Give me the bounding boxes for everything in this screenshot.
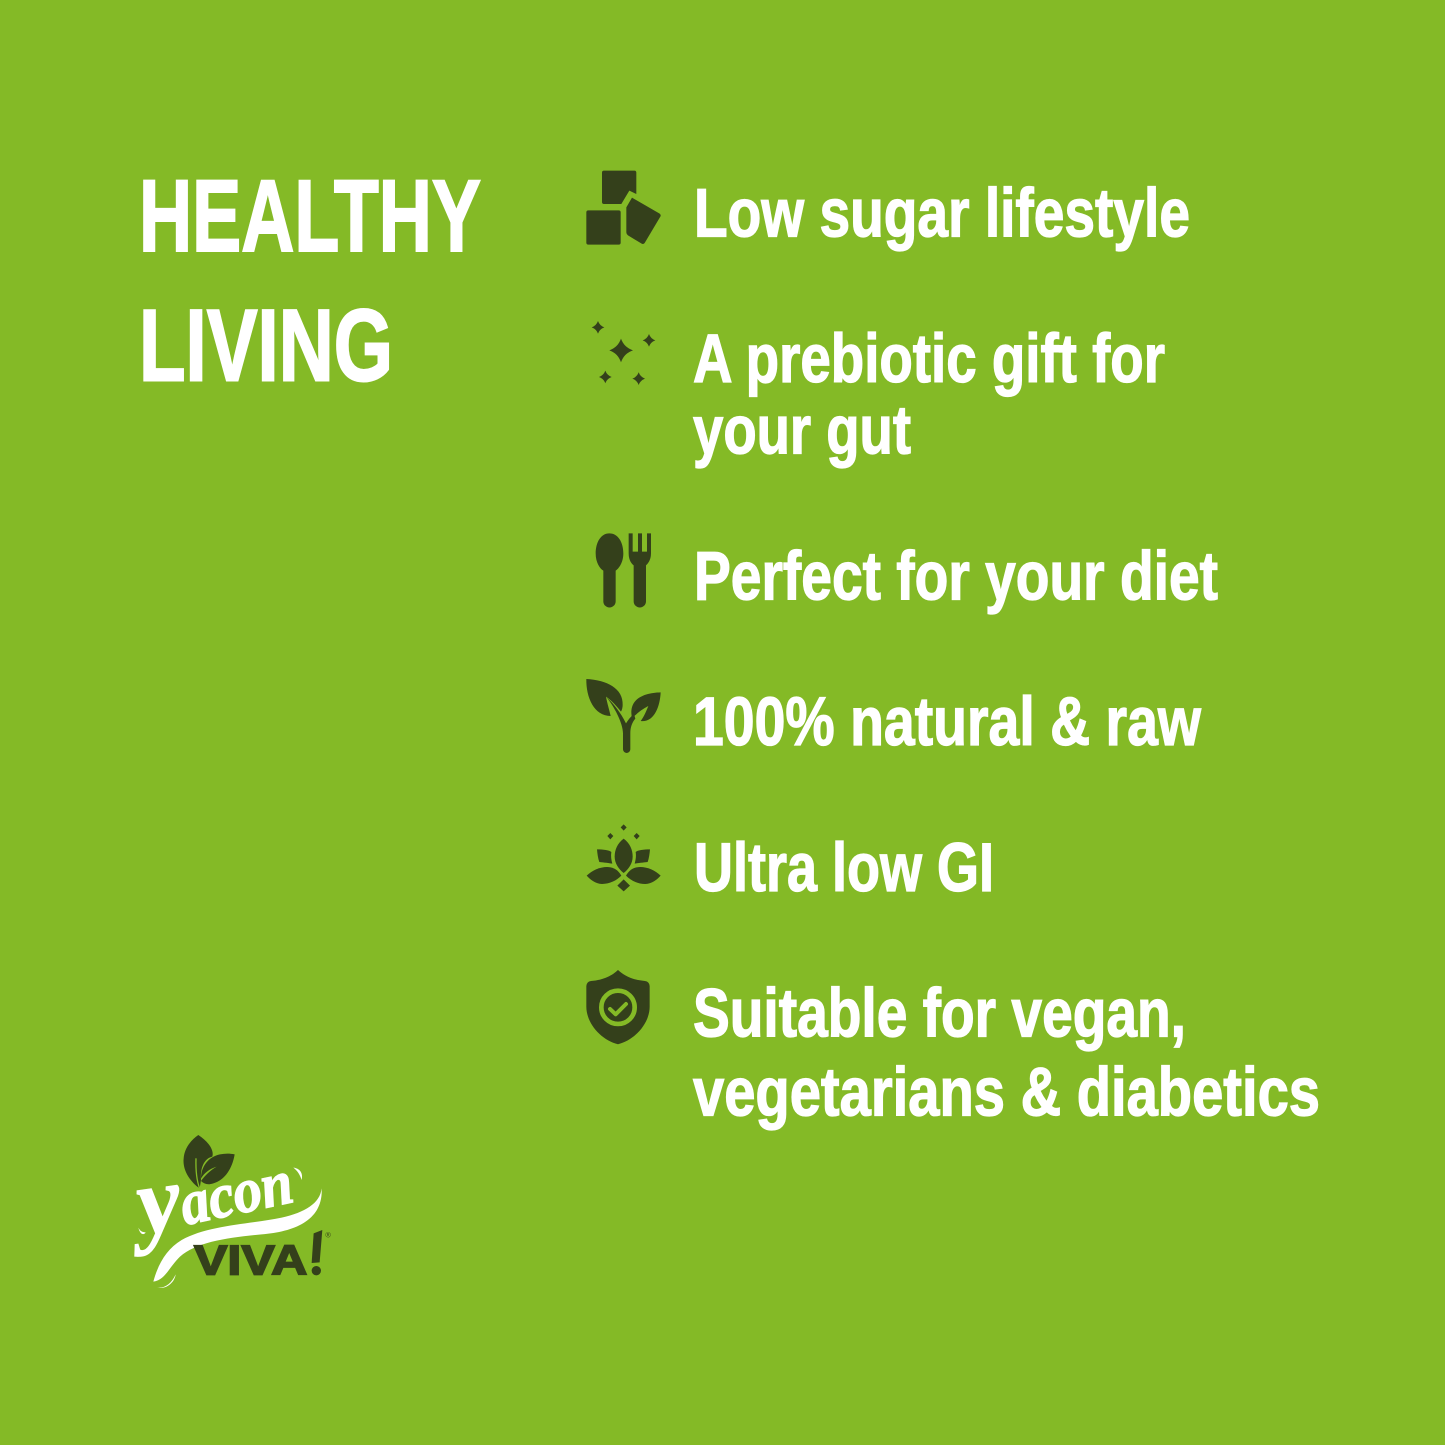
title: LIVING — [139, 288, 393, 402]
title: HEALTHY — [139, 159, 481, 273]
text: prebiotic gift: your gut — [693, 392, 911, 468]
logo script wordmark: y — [120, 1144, 188, 1257]
logo script wordmark — [120, 1144, 299, 1257]
logo script wordmark: acon — [173, 1147, 299, 1239]
text: natural and raw: 100% natural & raw — [693, 683, 1201, 760]
logo registered mark: ® — [325, 1231, 331, 1240]
text: suitable for vegan — [693, 974, 1320, 1130]
logo: Yacon Viva — [120, 1135, 331, 1288]
text: ultra low GI: Ultra low GI — [694, 829, 994, 906]
logo word VIVA: VIVA — [194, 1237, 307, 1283]
text: suitable for vegan: vegetarians & diabetics — [693, 1054, 1320, 1130]
text: prebiotic gift — [693, 320, 1165, 468]
logo leaves — [184, 1135, 235, 1188]
logo swoosh — [138, 1168, 322, 1288]
icon: sugar cubes — [586, 171, 661, 245]
text: prebiotic gift: A prebiotic gift for — [693, 320, 1165, 397]
icon: sprout — [586, 679, 661, 753]
icon: sparkles — [592, 321, 655, 385]
title — [139, 159, 481, 402]
text: suitable for vegan: Suitable for vegan, — [693, 974, 1186, 1052]
logo exclamation mark — [312, 1230, 322, 1275]
text: low sugar lifestyle: Low sugar lifestyle — [694, 174, 1190, 252]
icon: spoon and fork — [596, 533, 651, 607]
icon: shield with check — [586, 970, 650, 1044]
text: perfect for your diet: Perfect for your diet — [694, 538, 1218, 614]
icon: lotus — [587, 824, 661, 891]
